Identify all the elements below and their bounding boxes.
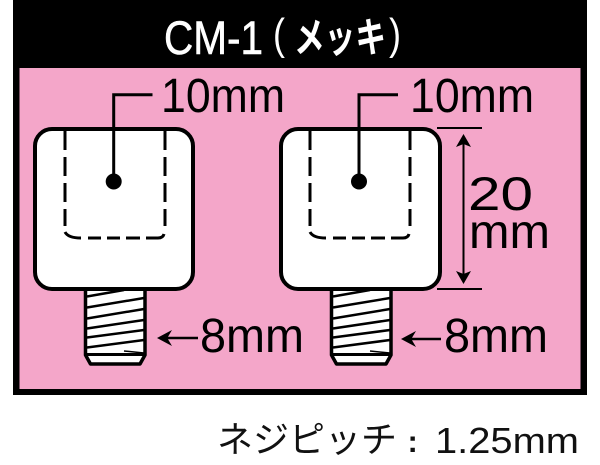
- label: 10mm: 10mm: [410, 70, 534, 123]
- panel: pink background: [20, 68, 580, 389]
- title: [164, 4, 401, 64]
- thread pitch note: [217, 411, 579, 463]
- title: (: [273, 10, 285, 59]
- arrow: 8mm: [157, 330, 198, 346]
- leader line and dot: [106, 95, 152, 190]
- label: 10mm: 10mm: [161, 70, 285, 123]
- dimension: 20mm height: [437, 128, 550, 289]
- title: ): [389, 10, 401, 59]
- title: CM-1: [164, 11, 263, 64]
- threaded shank: [332, 288, 391, 364]
- thread pitch note: 1.25mm: [435, 420, 579, 461]
- threaded shank: [86, 288, 145, 364]
- title: メッキ: [294, 4, 386, 64]
- label: mm: mm: [469, 206, 550, 259]
- right bolt: [281, 70, 548, 364]
- thread pitch note: ネジピッチ: [217, 411, 397, 463]
- label: 8mm: 8mm: [200, 310, 304, 363]
- label: 8mm: 8mm: [444, 310, 548, 363]
- thread pitch note: :: [408, 424, 418, 459]
- arrow: 8mm: [401, 331, 441, 347]
- hidden hole outline: [65, 131, 165, 238]
- bolt head: [35, 129, 193, 289]
- label: 20: 20: [468, 167, 533, 220]
- left bolt: [35, 70, 304, 364]
- hidden hole outline: [310, 131, 410, 238]
- bolt head: [281, 129, 440, 289]
- leader line and dot: [351, 95, 398, 190]
